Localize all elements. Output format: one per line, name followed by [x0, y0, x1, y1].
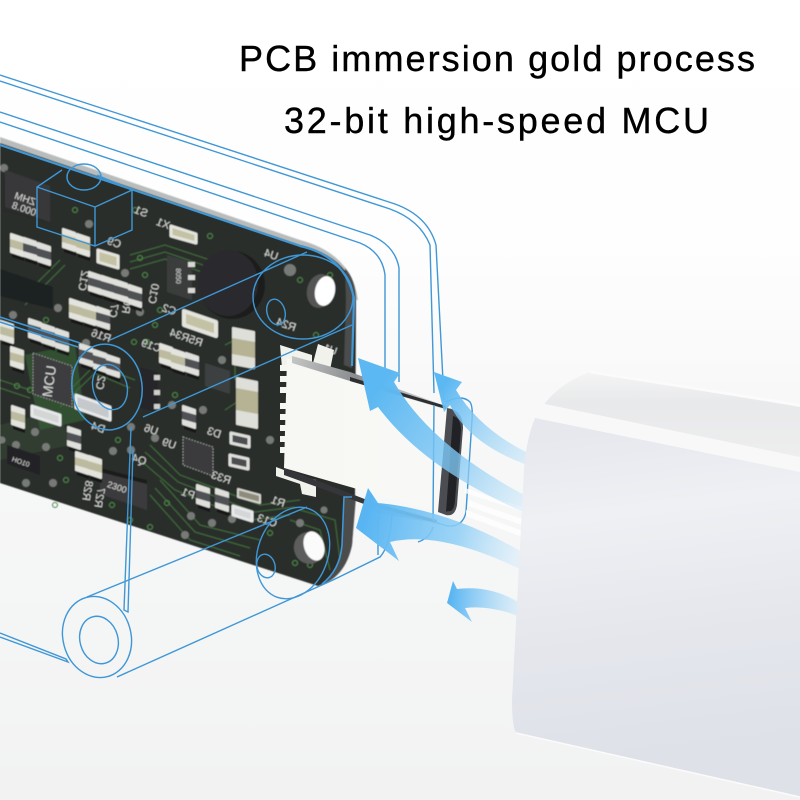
silkscreen labels: R1: [269, 494, 287, 510]
arrow: right upper: [434, 372, 530, 466]
chip MCU: MCU: [39, 364, 59, 398]
silkscreen labels: D4: [89, 420, 107, 436]
silkscreen labels: C19: [139, 337, 162, 355]
silkscreen labels: R5R34: [168, 327, 204, 349]
charger white strip: [535, 404, 800, 473]
charger top face: [545, 372, 800, 460]
chip ZHM: ZHM: [13, 191, 37, 208]
chip small: [205, 363, 230, 394]
circuit board: [0, 137, 358, 586]
silkscreen labels: R33: [209, 469, 232, 487]
silkscreen labels: [75, 204, 339, 530]
mounting hole upper: [304, 272, 338, 310]
chip 01OH: [7, 445, 40, 475]
silkscreen labels: C12: [75, 270, 91, 292]
silkscreen labels: R16: [89, 327, 112, 345]
connector solder tabs: [280, 344, 334, 370]
silkscreen labels: R6: [119, 299, 133, 314]
airflow streaks: [465, 488, 525, 538]
chip ZHM: [3, 170, 50, 223]
silkscreen labels: C7: [106, 303, 120, 318]
silkscreen labels: C2: [160, 302, 178, 318]
chip SOIC top: 8050: [174, 268, 181, 284]
chip QFN: [183, 437, 213, 476]
chip 2300: 2300: [106, 479, 128, 495]
surface mount components: [0, 226, 260, 521]
left needle lines: [0, 633, 68, 662]
charger top edge highlight: [590, 372, 800, 405]
silkscreen labels: S1: [133, 204, 149, 220]
inductor: [198, 250, 265, 319]
wireframe: circles and tangents: [0, 145, 472, 685]
board substrate: [0, 143, 356, 586]
silkscreen labels: U1: [321, 342, 339, 358]
silkscreen labels: X1: [155, 216, 171, 232]
silkscreen labels: D3: [205, 425, 223, 441]
connector top shading: [292, 356, 446, 409]
USB-C connector: [276, 344, 463, 525]
cube: [37, 170, 132, 246]
silkscreen labels: C9: [105, 235, 123, 251]
connector body: [284, 358, 446, 512]
charger front face: [512, 418, 800, 797]
heading: [239, 38, 755, 141]
chip MCU: [33, 353, 72, 407]
connector teeth: [280, 365, 289, 453]
charger bottom edge: [516, 733, 800, 797]
heading line 2: 32-bit high-speed MCU: [284, 100, 709, 141]
silkscreen labels: C10: [145, 283, 161, 305]
charger body: [512, 372, 800, 797]
lower standoff: [244, 497, 342, 609]
arrow: centre upper: [358, 358, 526, 513]
silkscreen labels: R27: [91, 487, 107, 509]
connector bottom shading: [284, 468, 437, 523]
chip left: [0, 269, 53, 309]
silkscreen labels: P1: [180, 486, 196, 502]
wireframe: upper housing lines: [0, 75, 444, 400]
heading line 1: PCB immersion gold process: [239, 38, 755, 79]
lower cylinder: [54, 589, 140, 685]
board side band: [318, 268, 356, 586]
silkscreen labels: Q4: [130, 452, 148, 468]
chip 01OH: 01OH: [11, 456, 30, 469]
silkscreen labels: R24: [274, 316, 297, 334]
silkscreen labels: U6: [142, 422, 160, 438]
chip 2300: [100, 468, 147, 510]
chip U6: [140, 367, 160, 413]
silkscreen labels: U9: [160, 436, 178, 452]
silkscreen labels: C13: [255, 512, 278, 530]
connector port opening: [438, 408, 463, 515]
green copper traces: [0, 245, 340, 570]
board edge bevel: [0, 137, 358, 300]
silkscreen labels: R28: [79, 480, 95, 502]
airflow arrows: [356, 358, 530, 622]
arrow: bottom: [447, 581, 518, 622]
arrow: lower: [356, 488, 522, 570]
silkscreen labels: U4: [262, 247, 280, 263]
mounting hole lower: [290, 528, 328, 568]
chip ZHM: 000.8: [10, 200, 37, 219]
chip SOIC top: [167, 255, 195, 300]
top board outline: [0, 145, 354, 366]
vertical pin: [124, 427, 133, 612]
silkscreen labels: C2: [93, 375, 107, 390]
middle standoff: [66, 340, 148, 434]
vias: [0, 164, 332, 568]
port outline: [418, 398, 472, 542]
upper standoff: [253, 255, 353, 339]
